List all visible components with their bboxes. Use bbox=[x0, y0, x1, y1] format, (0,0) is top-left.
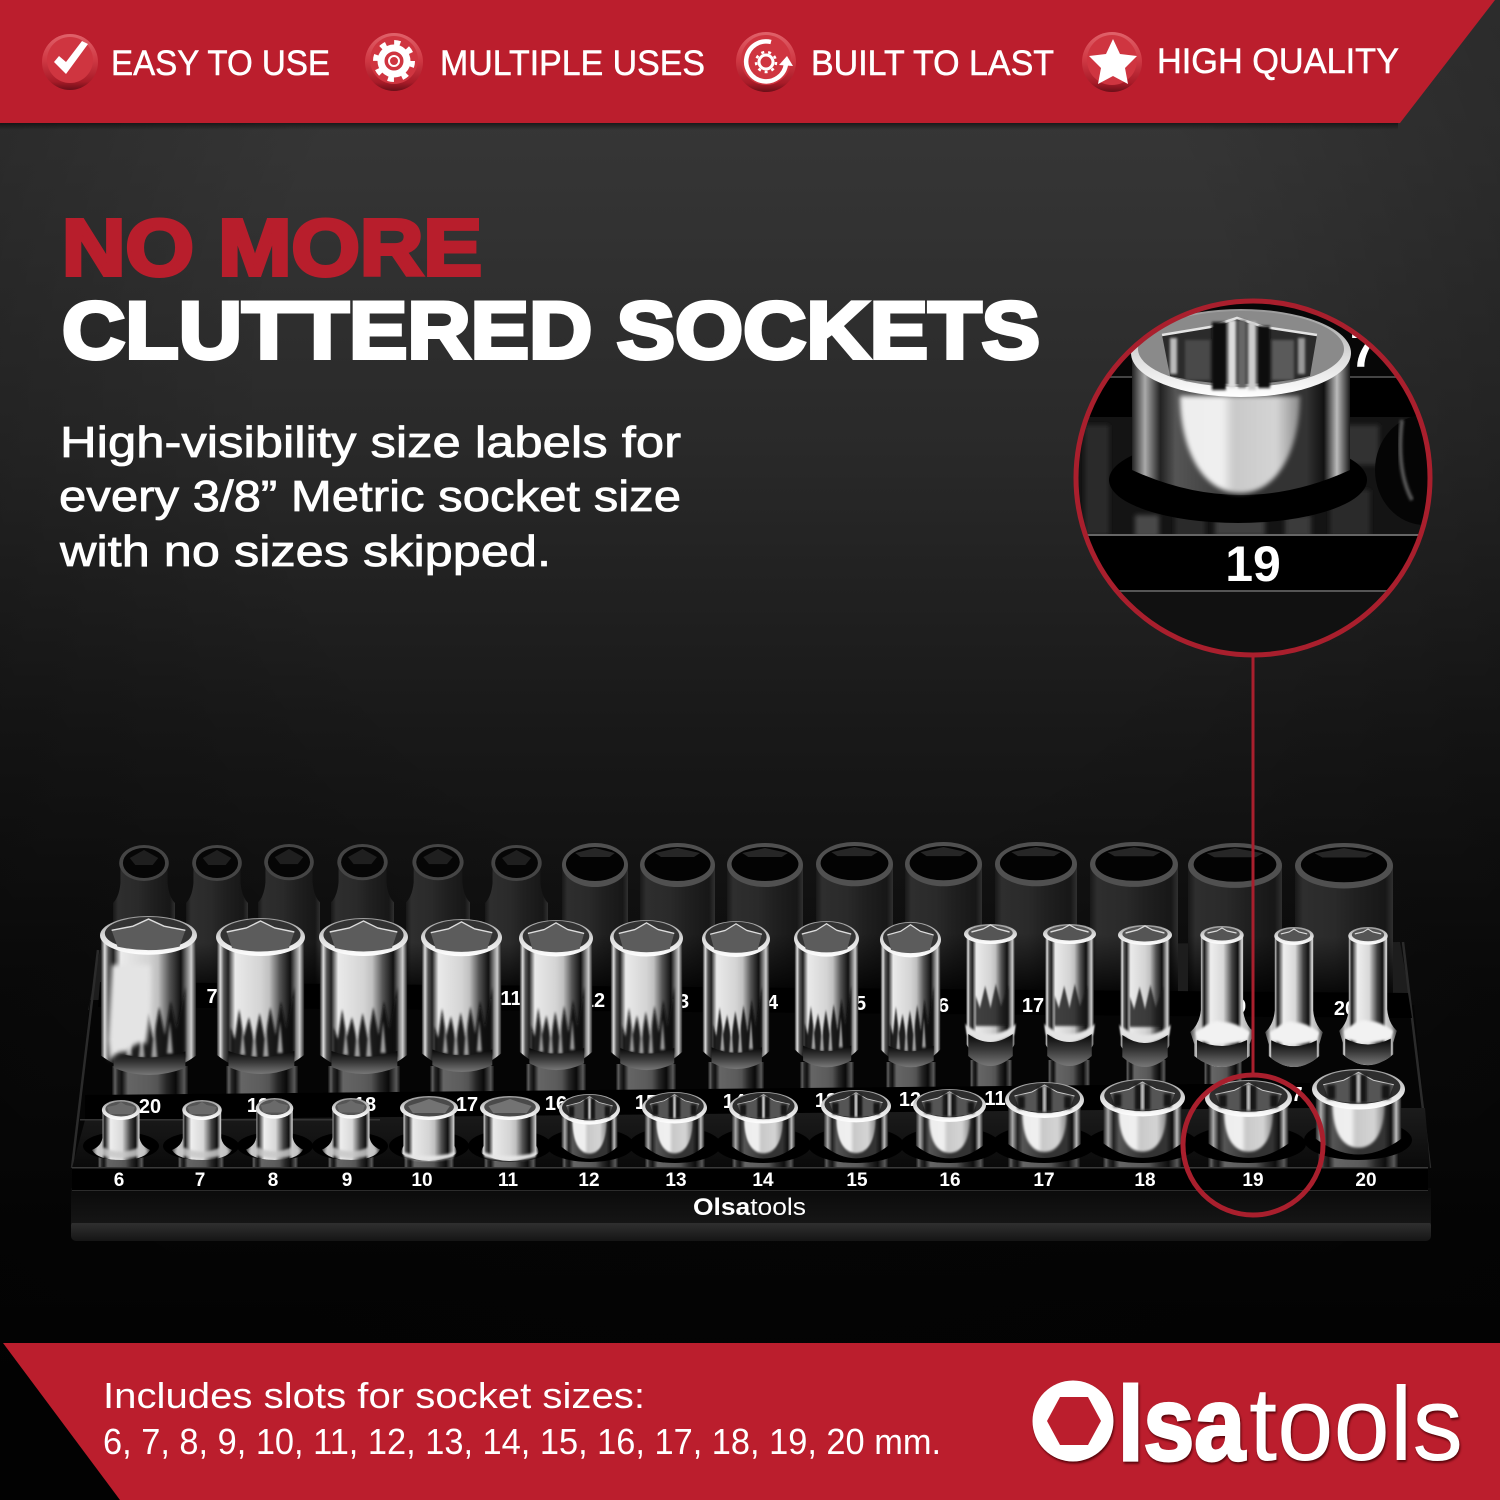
middle row label strip: 9 bbox=[1140, 1086, 1152, 1108]
back row label strip: 17 bbox=[1022, 995, 1044, 1017]
back row label strip: 15 bbox=[844, 993, 866, 1015]
back row black impact sockets bbox=[113, 842, 1393, 995]
included sizes text: Includes slots for socket sizes: bbox=[103, 1375, 645, 1416]
back row label strip bbox=[98, 982, 1412, 1020]
front row size labels: 6 bbox=[114, 1170, 124, 1191]
middle row label strip: 15 bbox=[635, 1092, 657, 1114]
front row size labels: 13 bbox=[665, 1170, 687, 1191]
description text: with no sizes skipped. bbox=[59, 527, 551, 576]
front row size labels: 9 bbox=[342, 1170, 352, 1191]
middle row label strip: 16 bbox=[545, 1093, 567, 1115]
tray side edges bbox=[72, 942, 1430, 1168]
icon: easy to use checkmark badge bbox=[42, 34, 98, 90]
tray front lip bbox=[71, 1167, 1431, 1241]
icon: high quality star badge bbox=[1082, 32, 1142, 92]
included sizes text bbox=[103, 1375, 941, 1462]
front row size labels: 17 bbox=[1033, 1170, 1055, 1191]
middle row label strip: 20 bbox=[139, 1096, 161, 1118]
back row label strip: 9 bbox=[357, 987, 369, 1009]
back row label strip: 18 bbox=[1123, 996, 1145, 1018]
callout: red connector and ring around socket 19 bbox=[1183, 655, 1323, 1215]
middle row label strip: 8 bbox=[1215, 1085, 1227, 1107]
lens magnified chrome socket bbox=[1131, 309, 1351, 495]
description text: High-visibility size labels for bbox=[60, 418, 681, 467]
front row size labels: 15 bbox=[846, 1170, 868, 1191]
front row size labels bbox=[114, 1170, 1377, 1191]
icon: built to last cycle badge bbox=[736, 32, 796, 92]
back row label strip: 7 bbox=[206, 986, 218, 1008]
brand logo: O bbox=[1032, 1359, 1114, 1484]
front row size labels: 20 bbox=[1355, 1170, 1377, 1191]
socket tray with sockets bbox=[71, 842, 1431, 1241]
title bbox=[62, 203, 1040, 376]
bright patch on largest socket bbox=[108, 965, 150, 1060]
back row label strip: 11 bbox=[500, 988, 522, 1010]
back row label strip: 16 bbox=[927, 995, 949, 1017]
back row label strip: 10 bbox=[427, 987, 449, 1009]
label: high quality: HIGH QUALITY bbox=[1157, 42, 1399, 81]
label: easy to use: EASY TO USE bbox=[111, 44, 330, 83]
middle row label strip: 18 bbox=[354, 1094, 376, 1116]
description text bbox=[59, 418, 681, 576]
icon: multiple uses gear badge bbox=[365, 33, 423, 91]
bottom red banner bbox=[3, 1343, 1500, 1500]
middle row label strip: 7 bbox=[1291, 1084, 1303, 1106]
brand logo bbox=[1032, 1359, 1463, 1484]
front row size labels: 14 bbox=[752, 1170, 774, 1191]
tray brand logo: Olsatools bbox=[693, 1194, 806, 1221]
lens neighbour label digit: 7 bbox=[1350, 322, 1378, 378]
brand logo: lsa bbox=[1118, 1366, 1246, 1483]
back row label strip: 20 bbox=[1334, 998, 1356, 1020]
tray back surface bbox=[88, 942, 1412, 1010]
back row label strip: 8 bbox=[284, 986, 296, 1008]
middle row label strip bbox=[72, 1083, 1430, 1168]
title: CLUTTERED SOCKETS bbox=[62, 286, 1040, 376]
front row size labels: 11 bbox=[498, 1170, 518, 1191]
included sizes text: 6, 7, 8, 9, 10, 11, 12, 13, 14, 15, 16, 17, 18, 19, 20 mm. bbox=[103, 1421, 941, 1462]
front row reflections bbox=[98, 1150, 1398, 1168]
middle row label strip: 13 bbox=[815, 1090, 837, 1112]
middle row chrome deep sockets bbox=[100, 916, 1397, 1075]
description text: every 3/8” Metric socket size bbox=[59, 472, 681, 521]
middle row label strip: 10 bbox=[1059, 1087, 1081, 1109]
brand logo: tools bbox=[1249, 1366, 1463, 1483]
title: NO MORE bbox=[62, 203, 482, 292]
lens label strip bbox=[1088, 536, 1418, 590]
tray top surface bbox=[72, 1000, 1430, 1170]
front row size labels: 10 bbox=[411, 1170, 433, 1191]
front row socket holes bbox=[83, 1120, 1412, 1163]
middle row label strip: 12 bbox=[899, 1089, 921, 1111]
label: built to last: BUILT TO LAST bbox=[811, 44, 1054, 83]
front row size labels: 8 bbox=[268, 1170, 278, 1191]
back row label strip: 13 bbox=[667, 991, 689, 1013]
middle row label strip: 19 bbox=[247, 1095, 269, 1117]
front row chrome shallow sockets bbox=[92, 1069, 1405, 1161]
back row label strip: 19 bbox=[1224, 996, 1246, 1018]
front row size labels: 19 bbox=[1242, 1170, 1264, 1191]
front row size labels: 12 bbox=[578, 1170, 600, 1191]
lens socket hole bbox=[1109, 456, 1367, 523]
middle row reflections bbox=[112, 1060, 1242, 1096]
back row label strip: 14 bbox=[756, 992, 779, 1014]
front row size labels: 16 bbox=[939, 1170, 961, 1191]
callout: magnified socket lens bbox=[1074, 298, 1432, 658]
middle row label strip: 17 bbox=[456, 1094, 478, 1116]
back row label strip: 12 bbox=[583, 990, 605, 1012]
middle row label strip: 14 bbox=[723, 1091, 746, 1113]
top red banner bbox=[0, 0, 1495, 130]
label: multiple uses: MULTIPLE USES bbox=[440, 44, 705, 83]
lens size label: 19 bbox=[1225, 536, 1281, 592]
lens tray surface bbox=[1070, 295, 1440, 535]
front row size labels: 18 bbox=[1134, 1170, 1156, 1191]
back row label strip: 6 bbox=[137, 985, 149, 1007]
middle row label strip: 11 bbox=[984, 1088, 1006, 1110]
front row size labels: 7 bbox=[195, 1170, 205, 1191]
